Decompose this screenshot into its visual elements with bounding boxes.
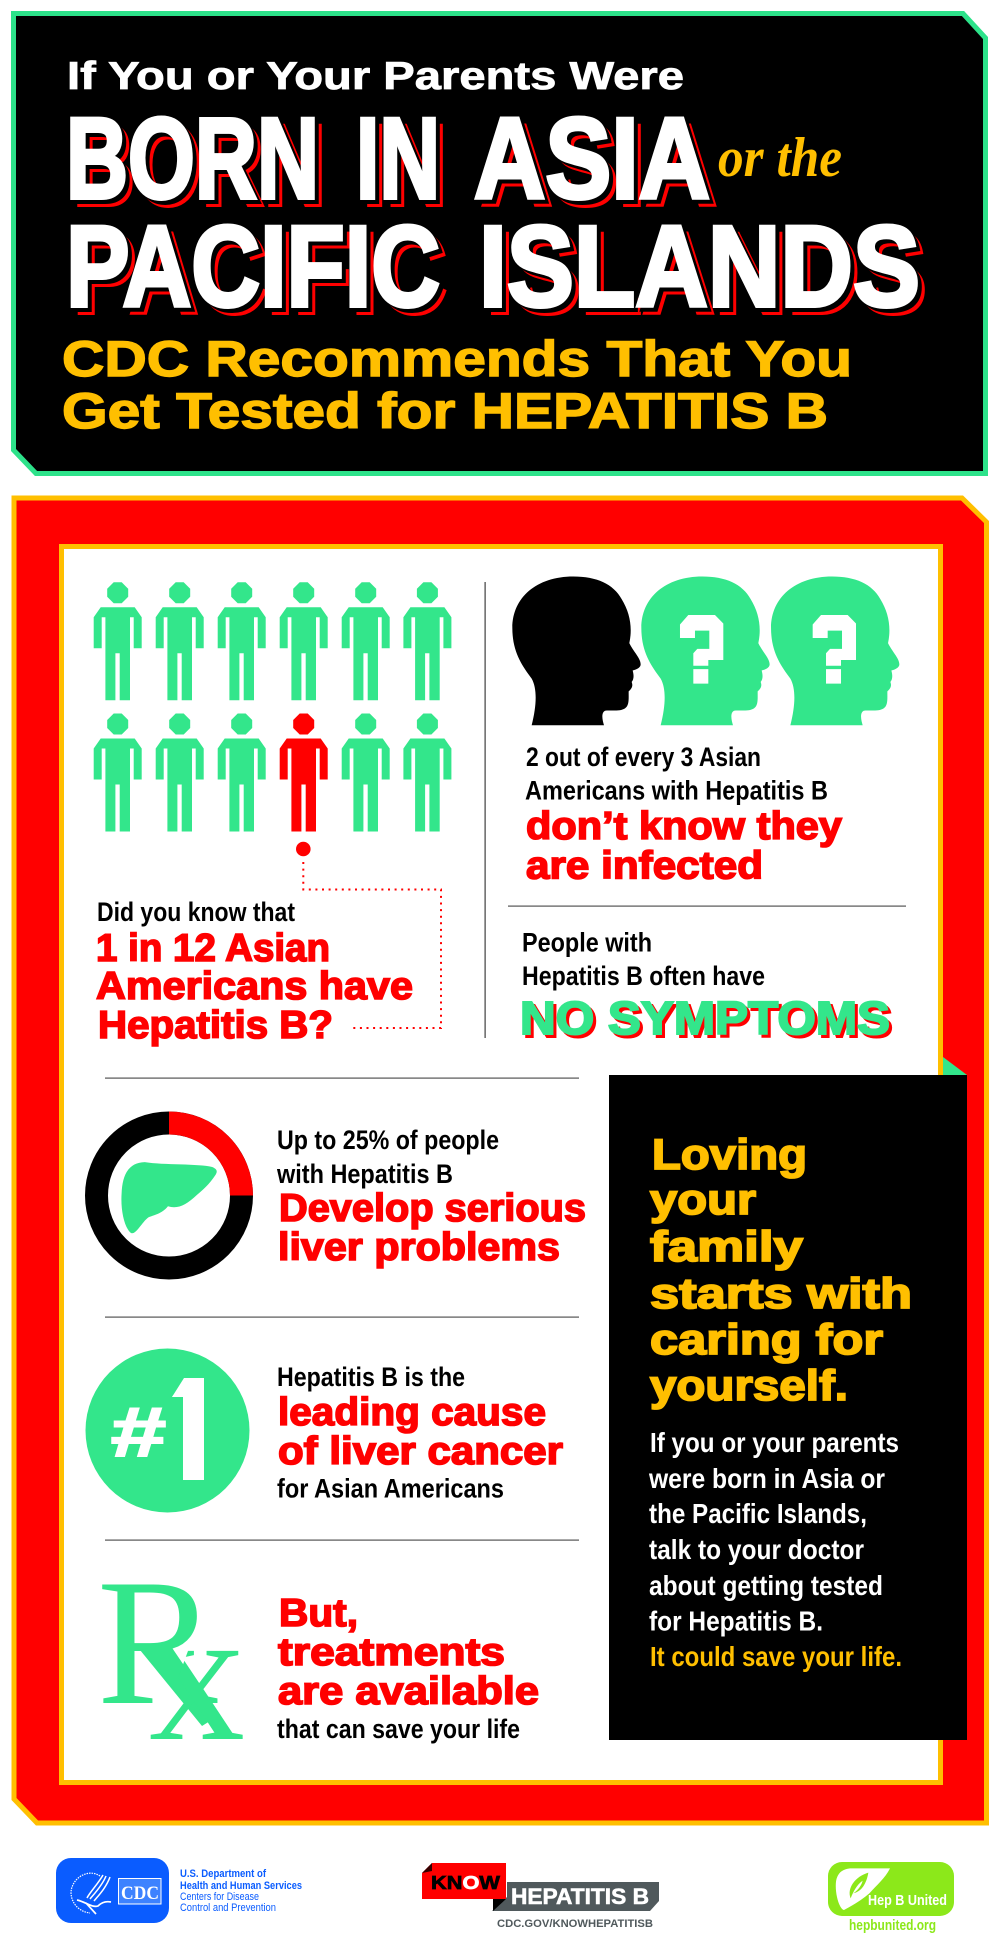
text: liver problems <box>276 1125 586 1269</box>
logo: HHS and CDC <box>56 1858 302 1923</box>
heading: born in asia: ASIA <box>478 99 714 227</box>
heading: born in asia: IN <box>363 102 447 230</box>
text: leading cause of liver cancer: for Asian Americans <box>277 1474 504 1504</box>
heading: pacific islands: ISLANDS <box>486 210 927 338</box>
logo: Know Hepatitis B: HEPATITIS B <box>511 1884 649 1909</box>
icon: HHS eagle <box>71 1873 111 1914</box>
text: 1 in 12 statistic: 1 in 12 Asian <box>96 927 330 970</box>
text: 2 out of 3 unaware: 2 out of every 3 Asian <box>526 742 761 772</box>
icon: Rx symbol: x <box>149 1568 245 1781</box>
text: 2 out of 3 unaware: are infected <box>526 844 763 888</box>
logo: Hep B United <box>828 1862 954 1934</box>
text: no symptoms: NO SYMPTOMS <box>520 992 890 1044</box>
text: talk to your doctor: the Pacific Islands, <box>649 1498 867 1529</box>
text: liver problems: Up to 25% of people <box>277 1125 499 1155</box>
icon: Rx symbol <box>102 1584 243 1739</box>
text: department name: Control and Prevention <box>180 1902 276 1914</box>
text: talk to your doctor: were born in Asia or <box>648 1463 885 1494</box>
heading: loving your family: caring for <box>650 1316 883 1364</box>
pictogram: 1 in 12 people <box>94 582 451 832</box>
heading: pacific islands: PACIFIC <box>73 210 447 338</box>
heading: pacific islands: ISLANDS <box>479 203 920 331</box>
text: 2 out of 3 unaware <box>525 742 843 888</box>
heading: intro line: If You or Your Parents Were <box>67 55 684 98</box>
icon: number one badge: # <box>111 1393 166 1471</box>
text: treatments available: treatments <box>278 1631 505 1674</box>
text: treatments available: But, <box>279 1592 358 1635</box>
decoration: green corner triangle <box>943 1057 967 1075</box>
panel: white content area <box>62 546 940 1782</box>
text: leading cause of liver cancer: of liver cancer <box>278 1430 563 1473</box>
logo: Know Hepatitis B: CDC.GOV/KNOWHEPATITISB <box>497 1918 653 1930</box>
text: liver problems: liver problems <box>278 1226 560 1269</box>
text: talk to your doctor: for Hepatitis B. <box>649 1606 823 1636</box>
logo: Hep B United: Hep B United <box>868 1892 947 1909</box>
text: 1 in 12 statistic: Hepatitis B? <box>98 1004 333 1047</box>
logo: Know Hepatitis B <box>422 1863 659 1930</box>
text: talk to your doctor <box>648 1427 902 1672</box>
text: talk to your doctor: about getting tested <box>649 1570 883 1601</box>
icon: number one badge <box>86 1348 250 1512</box>
heading: loving your family <box>650 1131 912 1410</box>
text: liver problems: Develop serious <box>279 1187 586 1230</box>
text: leading cause of liver cancer <box>277 1362 563 1504</box>
text: 2 out of 3 unaware: Americans with Hepatitis B <box>525 776 828 806</box>
heading: loving your family: your <box>650 1176 756 1224</box>
logo: Know Hepatitis B: KN OW <box>431 1873 500 1893</box>
heading: pacific islands: PACIFIC <box>66 203 440 331</box>
text: treatments available <box>277 1592 539 1744</box>
text: talk to your doctor: If you or your parents <box>650 1427 899 1458</box>
logo: CDC box: CDC <box>121 1883 159 1904</box>
heading: born in asia: BORN <box>73 102 326 230</box>
text: department name <box>180 1868 302 1914</box>
text: no symptoms: NO SYMPTOMS <box>523 995 893 1047</box>
heading: or the: or the <box>718 127 842 189</box>
text: 2 out of 3 unaware: don’t know they <box>526 805 843 848</box>
logo: Hep B United: hepbunited.org <box>849 1918 936 1934</box>
text: liver problems: with Hepatitis B <box>276 1159 453 1189</box>
heading: pacific islands <box>66 203 927 338</box>
text: no symptoms: People with <box>522 928 652 958</box>
text: department name: Health and Human Services <box>180 1880 302 1892</box>
text: 1 in 12 statistic: Americans have <box>96 965 413 1008</box>
panel: red frame <box>14 498 986 1823</box>
heading: born in asia: IN <box>360 99 444 227</box>
heading: born in asia: IN <box>356 95 440 223</box>
text: no symptoms: Hepatitis B often have <box>522 961 765 991</box>
panel: call to action <box>609 1075 967 1740</box>
panel: header banner <box>14 14 986 474</box>
chart: 25% donut with liver <box>96 1112 253 1268</box>
text: department name: Centers for Disease <box>180 1891 259 1903</box>
heading: loving your family: Loving <box>652 1131 807 1179</box>
heading: born in asia <box>66 95 717 230</box>
text: leading cause of liver cancer: Hepatitis B is the <box>277 1362 465 1392</box>
icon: three head silhouettes with question marks <box>512 577 899 725</box>
heading: loving your family: family <box>650 1223 803 1271</box>
heading: cdc recommendation <box>62 331 852 439</box>
text: treatments available: are available <box>278 1670 539 1713</box>
text: 1 in 12 statistic: Did you know that <box>97 897 295 927</box>
icon: number one badge: 1 <box>165 1351 215 1508</box>
heading: born in asia: ASIA <box>474 95 710 223</box>
text: 1 in 12 statistic <box>96 897 413 1047</box>
heading: born in asia: BORN <box>66 95 319 223</box>
heading: pacific islands: PACIFIC <box>70 207 444 335</box>
callout connector: dotted line from red person <box>296 842 441 1028</box>
text: talk to your doctor: It could save your life. <box>650 1641 902 1672</box>
text: department name: U.S. Department of <box>180 1868 266 1880</box>
icon: liver and leaf <box>836 1868 890 1910</box>
heading: cdc recommendation: Get Tested for HEPATITIS B <box>62 383 828 439</box>
icon: liver <box>121 1162 217 1233</box>
heading: pacific islands: ISLANDS <box>483 207 924 335</box>
text: leading cause of liver cancer: leading cause <box>278 1391 546 1434</box>
text: treatments available: that can save your life <box>277 1714 520 1744</box>
heading: loving your family: yourself. <box>650 1362 848 1410</box>
icon: Rx symbol: R <box>97 1543 218 1743</box>
heading: cdc recommendation: CDC Recommends That You <box>62 331 852 387</box>
text: no symptoms <box>520 928 893 1047</box>
heading: born in asia: BORN <box>70 99 323 227</box>
heading: loving your family: starts with <box>650 1270 912 1318</box>
text: talk to your doctor: talk to your doctor <box>649 1534 864 1565</box>
heading: born in asia: ASIA <box>481 102 717 230</box>
